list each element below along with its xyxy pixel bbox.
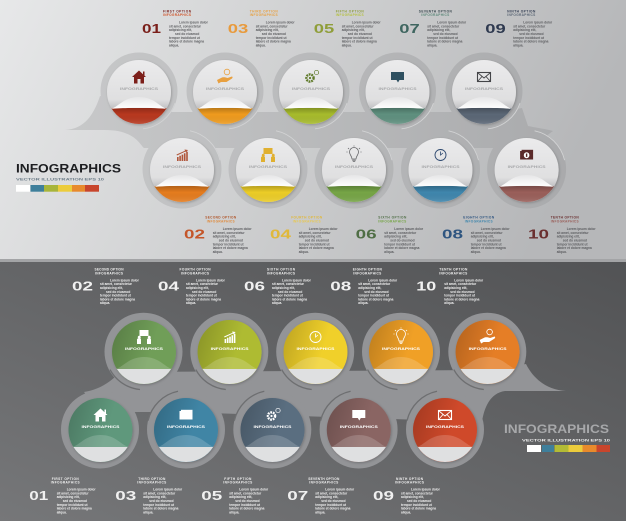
text block dark 02: 02 [72,280,93,294]
text block dark 02: aliqua. [100,301,110,305]
text block 01: 01 [142,22,161,36]
text block 01: adipisicing elit, [169,28,192,32]
text block dark 08: labore et dolore magna [358,297,394,301]
text block 09: labore et dolore magna [513,40,549,44]
text block dark 03: aliqua. [143,510,154,514]
text block dark 03: INFOGRAPHICS [137,481,166,485]
text block dark 07: tempor incididunt ut [315,503,347,507]
text block 09: tempor incididunt ut [513,36,545,40]
text block 05: 05 [314,22,334,36]
text block dark 04: Lorem ipsum dolor [196,278,226,282]
badge dark 10 [456,320,520,384]
text block 03: adipisicing elit, [256,28,279,32]
text block 08: Lorem ipsum dolor [481,227,510,231]
text block 10: Lorem ipsum dolor [567,227,596,231]
text block 09: sit amet, consectetur [513,24,546,28]
text block dark 05: labore et dolore magna [229,507,265,511]
subheading: VECTOR ILLUSTRATION EPS 10 [522,437,611,442]
text block dark 04: aliqua. [186,301,196,305]
text block dark 01: Lorem ipsum dolor [67,488,96,492]
text block dark 07: sed do eiusmod [321,499,346,503]
text block dark 06: adipisicing elit, [272,286,295,290]
text block dark 08: aliqua. [358,301,369,305]
text block dark 03: 03 [115,489,136,503]
text block 06 [356,216,424,254]
text block 02: adipisicing elit, [213,235,236,239]
ring shadows: dark [110,370,484,421]
text block 06: INFOGRAPHICS [378,219,406,223]
text block 03: sed do eiusmod [262,32,286,36]
text block dark 02: sit amet, consectetur [100,282,133,286]
text block dark 08: INFOGRAPHICS [353,271,381,275]
text block dark 02: sed do eiusmod [106,290,130,294]
text block dark 06 [244,268,312,305]
text block dark 09: sed do eiusmod [407,499,431,503]
text block 05: adipisicing elit, [342,28,365,32]
text block 03 [228,9,295,48]
text block dark 10 [416,268,484,305]
text block dark 02: labore et dolore magna [100,297,135,301]
text block dark 07: sit amet, consectetur [315,491,348,495]
text block dark 08: tempor incididunt ut [358,294,390,298]
colour strip [16,185,99,192]
title: light [16,162,121,192]
dark panel background [0,262,626,521]
text block dark 04: FOURTH OPTION [180,268,211,272]
text block 07 [399,9,467,48]
badge 03: INFOGRAPHICS [206,87,245,91]
text block dark 10: adipisicing elit, [444,286,467,290]
text block 07: adipisicing elit, [427,28,450,32]
badge 03 [193,60,257,124]
text block dark 04: sed do eiusmod [192,290,216,294]
text block dark 04: sit amet, consectetur [186,282,219,286]
badge 09: INFOGRAPHICS [465,87,504,91]
text block 01: sed do eiusmod [175,32,199,36]
badge dark 05: INFOGRAPHICS [254,425,292,429]
badge 01 [107,60,171,124]
text block dark 09: NINTH OPTION [396,477,424,481]
text block dark 05: Lorem ipsum dolor [239,488,269,492]
text block dark 08: sed do eiusmod [364,290,389,294]
text block 03: INFOGRAPHICS [250,13,278,17]
text block 03: 03 [228,22,248,36]
badge dark 04 [198,320,262,384]
text block 08 [442,216,510,254]
badge dark 03: INFOGRAPHICS [167,425,206,429]
text block dark 01: sed do eiusmod [63,499,87,503]
text block dark 07: labore et dolore magna [315,507,351,511]
badge dark 06: INFOGRAPHICS [296,347,335,351]
text block dark 01: labore et dolore magna [57,507,92,511]
text block dark 08: adipisicing elit, [358,286,381,290]
text block dark 02: Lorem ipsum dolor [110,278,140,282]
badge 05: INFOGRAPHICS [292,87,331,91]
badge dark 01: INFOGRAPHICS [82,425,120,429]
text block dark 09: aliqua. [401,510,411,514]
text block 09: aliqua. [513,44,524,48]
text block 06: sed do eiusmod [390,238,415,242]
badge 06: INFOGRAPHICS [335,165,374,169]
text block 07: sit amet, consectetur [427,24,460,28]
text block 01: aliqua. [169,44,179,48]
text block 04: tempor incididunt ut [299,242,330,246]
connector band: dark [84,364,566,422]
text block 01: Lorem ipsum dolor [179,21,209,25]
text block 01: INFOGRAPHICS [163,13,191,17]
text block dark 03 [115,477,183,514]
text block dark 09: INFOGRAPHICS [395,481,424,485]
text block dark 07: Lorem ipsum dolor [325,488,355,492]
text block dark 01: aliqua. [57,510,67,514]
badge 01: INFOGRAPHICS [120,87,159,91]
text block dark 07 [287,477,355,514]
text block 09 [485,9,553,48]
text block 08: INFOGRAPHICS [465,219,493,223]
text block dark 05: aliqua. [229,510,240,514]
text block dark 06: aliqua. [272,301,282,305]
badge 10 [495,138,559,202]
text block 08: labore et dolore magna [471,246,506,250]
text block 02: tempor incididunt ut [213,242,244,246]
badge 05 [279,60,343,124]
rings: dark [61,313,526,468]
text block 01: tempor incididunt ut [169,36,201,40]
text block 08: aliqua. [471,250,481,254]
text block 04: sed do eiusmod [305,238,329,242]
badge dark 08: INFOGRAPHICS [382,347,421,351]
text block 09: Lorem ipsum dolor [523,21,553,25]
text block dark 06: sit amet, consectetur [272,282,305,286]
text block dark 06: INFOGRAPHICS [267,271,295,275]
text block dark 10: labore et dolore magna [444,297,480,301]
badge 10: INFOGRAPHICS [508,165,547,169]
text block 08: adipisicing elit, [471,235,494,239]
text block 01: labore et dolore magna [169,40,204,44]
text block dark 04: labore et dolore magna [186,297,221,301]
text block dark 05: FIFTH OPTION [224,477,252,481]
subheading: VECTOR ILLUSTRATION EPS 10 [16,176,105,182]
text block 05: sit amet, consectetur [342,24,374,28]
badge 02: INFOGRAPHICS [163,165,202,169]
text block 07: INFOGRAPHICS [421,13,449,17]
text block 03: tempor incididunt ut [256,36,287,40]
text block 05: sed do eiusmod [348,32,372,36]
text block 06: 06 [356,228,377,242]
text block dark 05: INFOGRAPHICS [223,481,252,485]
text block dark 08: EIGHTH OPTION [353,268,382,272]
badge dark 09 [413,398,477,462]
text block 10: TENTH OPTION [551,216,579,220]
text block 05 [314,9,381,48]
text block 05: aliqua. [342,44,352,48]
badge 07 [366,60,430,124]
text block dark 09: sit amet, consectetur [401,491,434,495]
text block 01: sit amet, consectetur [169,24,202,28]
panel: dark version [0,262,626,521]
badge 04 [236,138,300,202]
text block 10: adipisicing elit, [557,235,580,239]
rings: light [100,52,566,208]
badge 09 [452,60,516,124]
badge dark 03 [154,398,218,462]
text block dark 06: 06 [244,280,265,294]
divider strip [0,259,626,262]
text block dark 03: tempor incididunt ut [143,503,175,507]
text block 02: Lorem ipsum dolor [223,227,252,231]
text block dark 04: INFOGRAPHICS [181,271,209,275]
badge 02 [150,138,214,202]
text block dark 06: Lorem ipsum dolor [282,278,312,282]
text block 07: Lorem ipsum dolor [437,21,467,25]
text block 10: aliqua. [557,250,567,254]
text block 02: SECOND OPTION [205,216,237,220]
text block dark 08: 08 [330,280,351,294]
badge dark 08 [369,320,433,384]
text block dark 07: INFOGRAPHICS [309,481,338,485]
text block dark 08: Lorem ipsum dolor [368,278,398,282]
text block 09: adipisicing elit, [513,28,536,32]
text block 10 [528,216,596,254]
text block dark 07: 07 [287,489,308,503]
text block 08: EIGHTH OPTION [463,216,495,220]
text block 02: labore et dolore magna [213,246,248,250]
text block dark 04: 04 [158,280,179,294]
text block dark 07: SEVENTH OPTION [308,477,340,481]
text block dark 04 [158,268,226,305]
text block dark 09: Lorem ipsum dolor [411,488,441,492]
text block 05: FIFTH OPTION [336,9,364,13]
badge 08: INFOGRAPHICS [422,165,461,169]
text block 08: 08 [442,228,463,242]
badge 07: INFOGRAPHICS [378,87,418,91]
text block 09: sed do eiusmod [519,32,544,36]
text block 07: sed do eiusmod [433,32,458,36]
text block dark 03: labore et dolore magna [143,507,179,511]
text block 05: tempor incididunt ut [342,36,373,40]
text block dark 10: sed do eiusmod [450,290,475,294]
text block dark 10: 10 [416,280,436,294]
text block 03: sit amet, consectetur [256,24,288,28]
text block 09: 09 [485,22,506,36]
text block 04: 04 [270,228,291,242]
text block dark 01: 01 [29,489,48,503]
connector band: light [65,96,553,148]
text block 08: sed do eiusmod [477,238,501,242]
text block 03: THIRD OPTION [250,9,278,13]
text block 07: tempor incididunt ut [427,36,459,40]
text block dark 02 [72,268,140,305]
text block dark 01: FIRST OPTION [52,477,79,481]
text block 10: INFOGRAPHICS [551,219,579,223]
text block 06: labore et dolore magna [384,246,420,250]
badge dark 04: INFOGRAPHICS [211,347,249,351]
text block dark 10: tempor incididunt ut [444,294,476,298]
text block 06: SIXTH OPTION [378,216,407,220]
badge dark 05 [240,398,304,462]
text block 05: Lorem ipsum dolor [352,21,381,25]
text block dark 05: tempor incididunt ut [229,503,261,507]
text block dark 08 [330,268,398,305]
text block 07: 07 [399,22,420,36]
text block dark 01: adipisicing elit, [57,495,80,499]
text block 02: 02 [184,228,205,242]
text block 08: tempor incididunt ut [471,242,502,246]
text block 09: NINTH OPTION [507,9,536,13]
text block 02: aliqua. [213,250,223,254]
heading: INFOGRAPHICS [504,422,609,436]
text block 06: tempor incididunt ut [384,242,416,246]
text block dark 05 [201,477,269,514]
text block dark 03: sed do eiusmod [149,499,174,503]
text block dark 02: adipisicing elit, [100,286,123,290]
text block 02 [184,216,252,254]
text block dark 01: tempor incididunt ut [57,503,88,507]
text block 05: labore et dolore magna [342,40,377,44]
text block dark 05: sed do eiusmod [235,499,260,503]
text block dark 01 [29,477,96,514]
badge dark 06 [284,320,348,384]
text block dark 03: THIRD OPTION [138,477,166,481]
text block dark 06: sed do eiusmod [278,290,302,294]
text block 02: INFOGRAPHICS [207,219,235,223]
text block dark 09: 09 [373,489,394,503]
text block dark 07: aliqua. [315,510,326,514]
text block 10: 10 [528,228,549,242]
badge dark 07: INFOGRAPHICS [340,425,379,429]
text block dark 09: tempor incididunt ut [401,503,433,507]
text block dark 02: SECOND OPTION [94,268,124,272]
text block 07: SEVENTH OPTION [419,9,452,13]
panel: light version [0,0,626,260]
text block 01 [142,9,209,48]
text block 10: labore et dolore magna [557,246,592,250]
text block dark 04: tempor incididunt ut [186,294,218,298]
light panel background [0,0,626,260]
badge dark 01 [68,398,132,462]
badge dark 10: INFOGRAPHICS [469,347,507,351]
text block 10: tempor incididunt ut [557,242,588,246]
text block 05: INFOGRAPHICS [336,13,364,17]
text block dark 01: INFOGRAPHICS [51,481,80,485]
text block 02: sit amet, consectetur [213,231,245,235]
text block 04: adipisicing elit, [299,235,322,239]
text block 06: Lorem ipsum dolor [394,227,424,231]
text block 10: sed do eiusmod [563,238,587,242]
text block dark 05: sit amet, consectetur [229,491,262,495]
text block 04: INFOGRAPHICS [293,219,321,223]
badge dark 09: INFOGRAPHICS [426,425,465,429]
text block dark 10: TENTH OPTION [439,268,468,272]
text block 07: aliqua. [427,44,438,48]
badge dark 07 [327,398,391,462]
text block 06: aliqua. [384,250,395,254]
text block dark 09: labore et dolore magna [401,507,436,511]
text block 07: labore et dolore magna [427,40,463,44]
text block dark 05: adipisicing elit, [229,495,252,499]
text block dark 10: INFOGRAPHICS [439,271,467,275]
text block dark 05: 05 [201,489,222,503]
text block 04 [270,216,338,254]
text block dark 10: sit amet, consectetur [444,282,477,286]
text block 03: labore et dolore magna [256,40,291,44]
badge dark 02 [112,320,176,384]
text block 06: sit amet, consectetur [384,231,417,235]
text block 10: sit amet, consectetur [557,231,589,235]
text block 08: sit amet, consectetur [471,231,503,235]
text block dark 01: sit amet, consectetur [57,491,89,495]
text block 06: adipisicing elit, [384,235,407,239]
text block 04: FOURTH OPTION [291,216,323,220]
heading: INFOGRAPHICS [16,162,121,176]
text block dark 04: adipisicing elit, [186,286,209,290]
text block 03: Lorem ipsum dolor [266,21,295,25]
badge 04: INFOGRAPHICS [249,165,288,169]
badge dark 02: INFOGRAPHICS [125,347,164,351]
text block dark 10: Lorem ipsum dolor [454,278,484,282]
text block dark 06: tempor incididunt ut [272,294,304,298]
text block 04: sit amet, consectetur [299,231,331,235]
badge 08 [408,138,472,202]
text block dark 02: INFOGRAPHICS [95,271,123,275]
title: dark [504,422,611,452]
text block dark 02: tempor incididunt ut [100,294,132,298]
text block dark 06: labore et dolore magna [272,297,307,301]
text block 02: sed do eiusmod [219,238,243,242]
text block dark 10: aliqua. [444,301,455,305]
ring highlights: light [143,103,565,160]
text block dark 03: sit amet, consectetur [143,491,176,495]
text block dark 03: adipisicing elit, [143,495,166,499]
text block dark 07: adipisicing elit, [315,495,338,499]
text block dark 09: adipisicing elit, [401,495,424,499]
text block 04: aliqua. [299,250,309,254]
text block 04: labore et dolore magna [299,246,334,250]
badge 06 [322,138,386,202]
text block 03: aliqua. [256,44,266,48]
text block dark 09 [373,477,441,514]
text block 09: INFOGRAPHICS [507,13,535,17]
text block 01: FIRST OPTION [163,9,192,13]
text block dark 06: SIXTH OPTION [267,268,296,272]
text block dark 08: sit amet, consectetur [358,282,391,286]
text block 04: Lorem ipsum dolor [309,227,338,231]
colour strip [527,445,610,452]
text block dark 03: Lorem ipsum dolor [153,488,183,492]
